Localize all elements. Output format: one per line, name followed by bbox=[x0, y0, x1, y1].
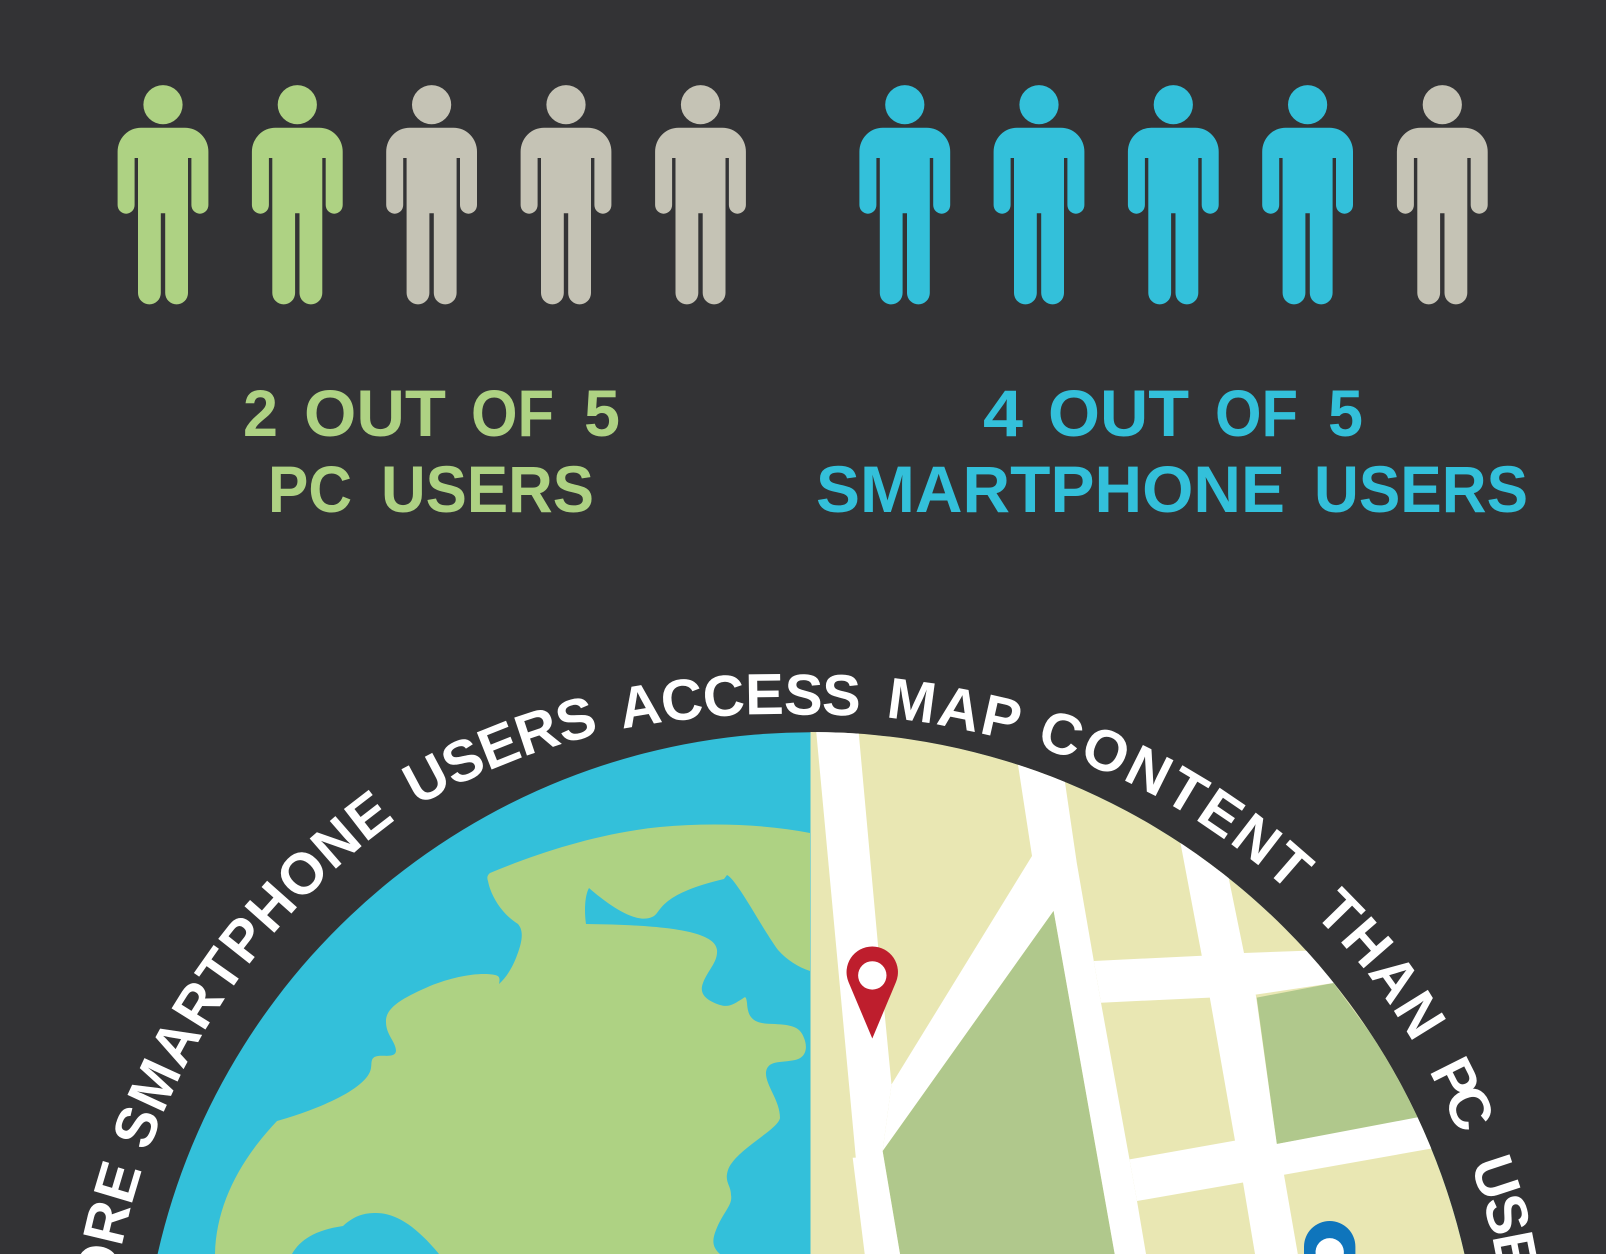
icon: person grey 3 bbox=[386, 85, 477, 304]
map park small bbox=[1257, 983, 1425, 1144]
map base bbox=[810, 725, 1470, 1254]
map half bbox=[810, 725, 1470, 1254]
curved headline text: THAN bbox=[1322, 886, 1446, 1040]
heading: PC users stat: PC bbox=[268, 452, 352, 526]
map roads bbox=[816, 725, 1440, 1254]
heading: smartphone users stat: USERS bbox=[1314, 452, 1528, 526]
heading: smartphone users stat bbox=[816, 376, 1528, 526]
icon: person cyan 1 bbox=[859, 85, 950, 304]
curved headline text: CONTENT bbox=[1042, 713, 1316, 884]
heading: PC users stat: USERS bbox=[381, 452, 594, 526]
pictogram row: 4 of 5 smartphone users bbox=[859, 85, 1488, 304]
heading: PC users stat: OF bbox=[471, 376, 554, 450]
globe land bbox=[215, 825, 810, 1254]
icon: person green 2 bbox=[252, 85, 343, 304]
pictogram row: 2 of 5 PC users bbox=[118, 85, 746, 304]
heading: PC users stat bbox=[243, 376, 620, 526]
icon: person cyan 3 bbox=[1128, 85, 1219, 304]
heading: smartphone users stat: OF bbox=[1215, 376, 1298, 450]
heading: smartphone users stat: OUT bbox=[1048, 376, 1189, 450]
map park large bbox=[883, 911, 1115, 1254]
icon: person cyan 4 bbox=[1262, 85, 1353, 304]
icon: person green 1 bbox=[118, 85, 208, 304]
icon: person grey 5 bbox=[655, 85, 746, 304]
icon: blue map pin bbox=[1304, 1221, 1355, 1254]
icon: person grey 4 bbox=[521, 85, 611, 304]
curved headline text: PC bbox=[1430, 1056, 1491, 1130]
icon: red map pin bbox=[847, 946, 898, 1038]
globe ocean bbox=[158, 732, 1464, 1254]
heading: PC users stat: 5 bbox=[584, 376, 620, 450]
heading: smartphone users stat: 5 bbox=[1328, 376, 1363, 450]
heading: PC users stat: 2 bbox=[243, 376, 278, 450]
curved headline text: ACCESS bbox=[624, 674, 858, 728]
curved headline text: USERS bbox=[402, 698, 595, 800]
icon: person cyan 2 bbox=[994, 85, 1084, 304]
heading: smartphone users stat: SMARTPHONE bbox=[816, 452, 1285, 526]
heading: PC users stat: OUT bbox=[304, 376, 446, 450]
icon: person grey 5 bbox=[1397, 85, 1488, 304]
curved headline text: SMARTPHONE bbox=[115, 790, 394, 1147]
globe and map circle bbox=[158, 725, 1470, 1254]
heading: smartphone users stat: 4 bbox=[983, 376, 1023, 450]
curved headline text: MAP bbox=[889, 678, 1020, 736]
